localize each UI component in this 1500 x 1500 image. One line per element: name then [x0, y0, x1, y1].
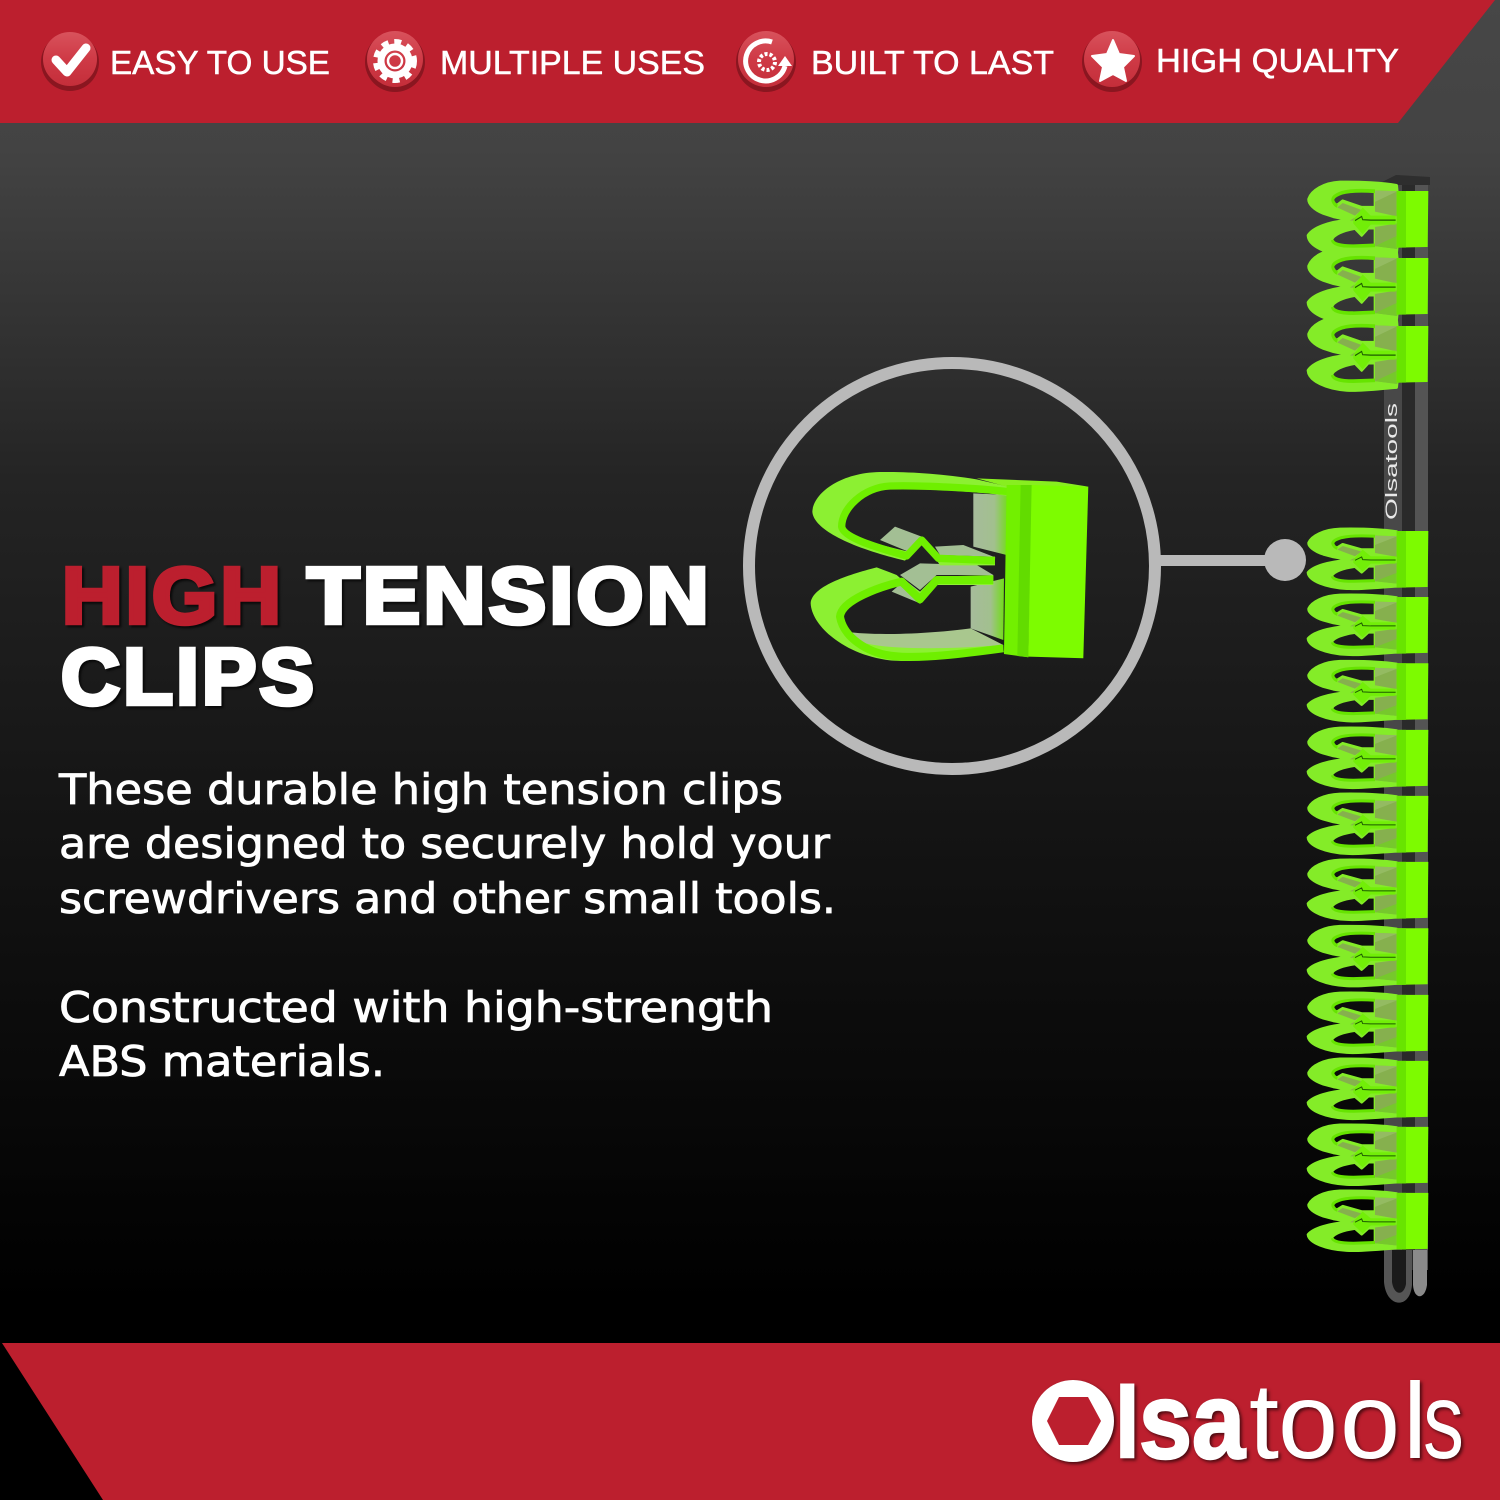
icon: star badge [1082, 31, 1142, 92]
heading [61, 551, 712, 721]
label: multiple uses: MULTIPLE USES [440, 44, 705, 81]
brand logo: l [1113, 1365, 1142, 1480]
icon: gear badge [365, 31, 425, 92]
heading: HIGH [62, 551, 284, 640]
callout: magnifier ring and connector [749, 363, 1306, 769]
heading: TENSION [307, 551, 712, 640]
product: rail with clips [1308, 175, 1430, 1303]
body text [58, 765, 836, 1086]
bottom banner [2, 1343, 1500, 1500]
icon: check badge [41, 32, 99, 91]
label: built to last: BUILT TO LAST [811, 44, 1054, 81]
label: high quality: HIGH QUALITY [1156, 42, 1399, 79]
enlarged clip [811, 472, 1088, 661]
body text: screwdrivers and other small tools. [59, 874, 836, 923]
brand logo: sa [1139, 1360, 1246, 1481]
brand logo: O [1034, 1362, 1112, 1483]
brand logo [1032, 1360, 1464, 1483]
icon: cycle badge [736, 31, 796, 92]
brand logo: tool [1249, 1360, 1427, 1481]
top banner [0, 0, 1495, 123]
top clip group [1308, 182, 1428, 390]
heading: CLIPS [61, 632, 317, 721]
rail [1380, 175, 1430, 1303]
brand logo: s [1423, 1360, 1464, 1481]
body text: Constructed with high-strength [59, 983, 773, 1032]
body text: are designed to securely hold your [59, 819, 831, 868]
body text: These durable high tension clips [58, 765, 783, 814]
rail logo: Olsatools [1382, 403, 1401, 520]
lower clip group [1308, 529, 1428, 1251]
label: easy to use: EASY TO USE [110, 44, 330, 81]
body text: ABS materials. [59, 1037, 385, 1086]
